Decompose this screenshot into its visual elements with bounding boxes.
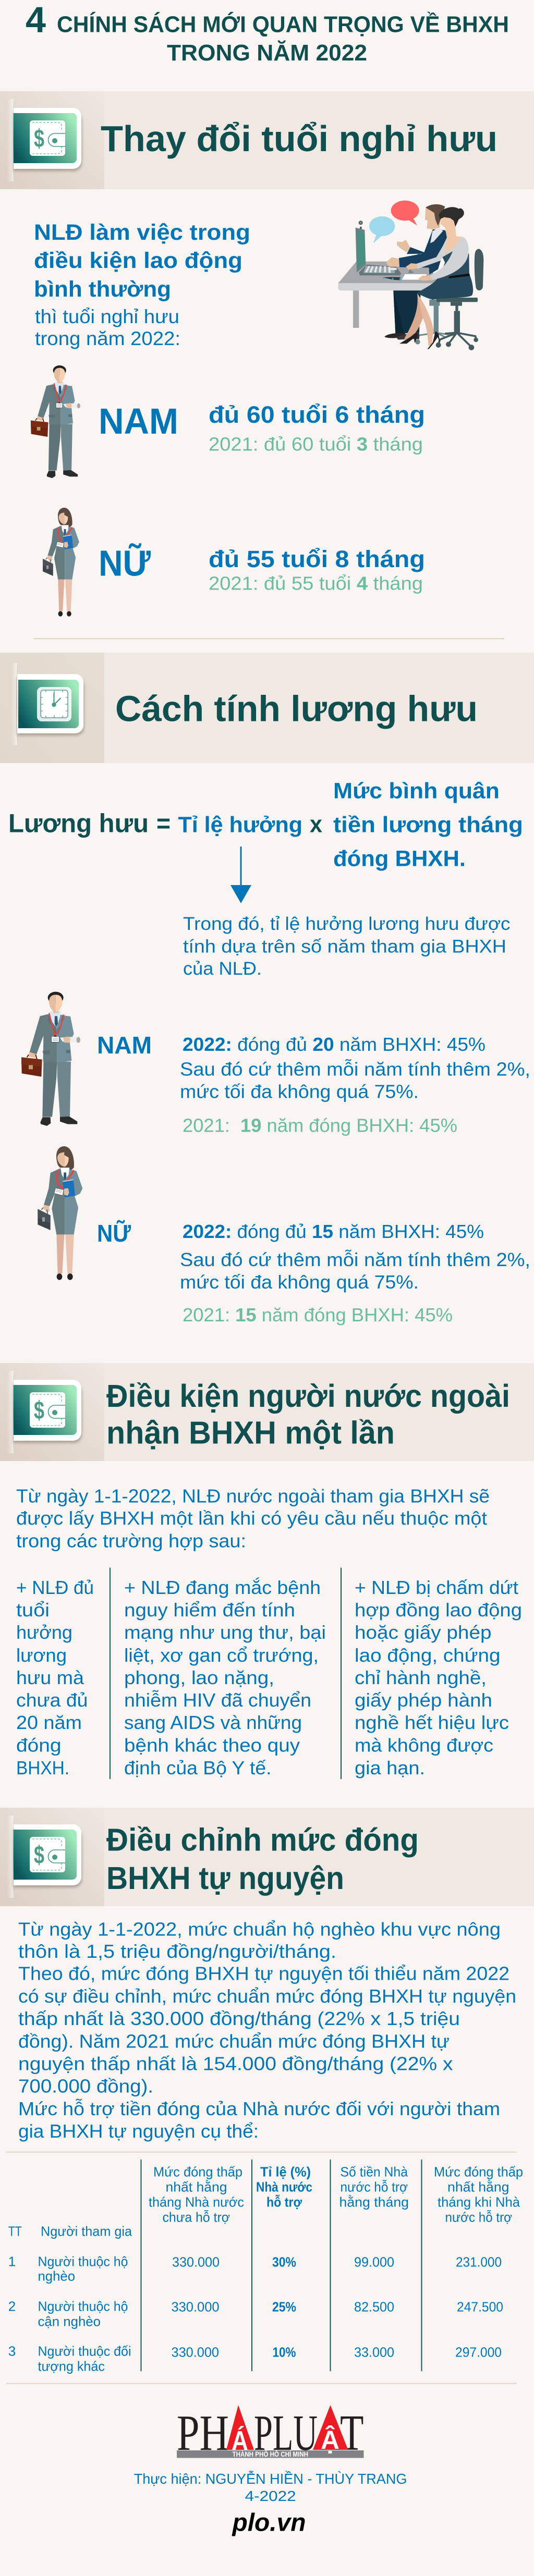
figure: man [21, 992, 80, 1126]
condition column 2: liệt, xơ gan cổ trướng, [124, 1645, 319, 1666]
formula: Tỉ lệ hưởng [178, 812, 302, 837]
condition column 3: + NLĐ bị chấm dứt [355, 1577, 518, 1598]
table row 2: 247.500 [457, 2299, 503, 2314]
pension rate for women: 2022: đóng đủ 15 năm BHXH: 45% [183, 1221, 484, 1242]
table row 3: 33.000 [354, 2345, 394, 2360]
credits [134, 2471, 407, 2504]
table header: Tỉ lệ (%) [260, 2164, 311, 2180]
condition column 3 [355, 1577, 522, 1778]
table row 1: 1 [8, 2254, 16, 2270]
label: NỮ: NỮ [99, 543, 151, 584]
retirement age for women [209, 546, 425, 594]
condition column 1: lương [16, 1645, 67, 1666]
figure: man [31, 365, 80, 478]
section banner: voluntary contribution: BHXH tự nguyện [106, 1860, 344, 1896]
section banner: retirement age: $ [34, 125, 44, 153]
table header: Mức đóng thấp [434, 2164, 523, 2180]
table header: nước hỗ trợ [340, 2179, 408, 2194]
paragraph: nguyện thấp nhất là 154.000 đồng/tháng (22% x [18, 2053, 453, 2075]
formula: Lương hưu [8, 809, 149, 838]
condition column 1: hưởng [16, 1622, 72, 1643]
logo: Pháp Luật: T [340, 2405, 364, 2461]
label: NAM: NAM [97, 1032, 152, 1059]
condition column 1: hưu mà [16, 1667, 84, 1688]
table header [8, 2164, 523, 2239]
condition column 1: + NLĐ đủ [16, 1577, 94, 1598]
condition column 2: định của Bộ Y tế. [124, 1757, 271, 1778]
paragraph: 700.000 đồng). [18, 2076, 153, 2096]
paragraph: đồng). Năm 2021 mức chuẩn mức đóng BHXH tự [18, 2031, 450, 2052]
condition column 3: chỉ hành nghề, [355, 1667, 487, 1688]
condition column 3: hợp đồng lao động [355, 1599, 522, 1621]
table row 2: 25% [272, 2299, 296, 2314]
table row 1: Người thuộc hộ [38, 2254, 128, 2270]
paragraph: thôn là 1,5 triệu đồng/người/tháng. [18, 1941, 336, 1962]
retirement age for men: 2021: đủ 60 tuổi 3 tháng [209, 434, 423, 455]
table: state support levels [6, 2152, 523, 2384]
figure: woman [38, 1146, 82, 1280]
retirement age for men: đủ 60 tuổi 6 tháng [209, 401, 425, 428]
table row 3: Người thuộc đối [38, 2344, 131, 2359]
title [26, 0, 509, 66]
intro paragraph: Từ ngày 1-1-2022, NLĐ nước ngoài tham gia BHXH sẽ [16, 1486, 490, 1506]
table header: nhất hằng [166, 2179, 227, 2194]
icon: clock [37, 687, 71, 721]
figure: woman [43, 508, 79, 617]
logo: Pháp Luật: Ậ [321, 2425, 339, 2455]
table header: hỗ trợ [266, 2194, 302, 2210]
condition column 1: BHXH. [16, 1757, 69, 1778]
table row 1: 99.000 [354, 2254, 394, 2270]
paragraph: có sự điều chỉnh, mức chuẩn mức đóng BHXH tự nguyện [18, 1985, 516, 2007]
table header: nước hỗ trợ [445, 2209, 512, 2225]
retirement age for men [209, 401, 425, 455]
formula: tiền lương tháng [333, 812, 523, 837]
section banner: voluntary contribution [0, 1808, 534, 1906]
panel: voluntary contribution [0, 1808, 534, 2384]
table row 2: 330.000 [171, 2299, 219, 2314]
table row 1: nghèo [38, 2268, 75, 2284]
explanation text [183, 914, 510, 979]
section banner: foreign workers: nhận BHXH một lần [106, 1415, 395, 1450]
table row 3: 297.000 [455, 2345, 502, 2360]
formula: Mức bình quân [333, 779, 500, 804]
condition column 2: sang AIDS và những [124, 1712, 302, 1733]
section banner: foreign workers: Điều kiện người nước ngoài [106, 1378, 510, 1414]
logo: Pháp Luật [177, 2405, 364, 2461]
table row 3: tượng khác [38, 2358, 105, 2374]
condition column 3: gia hạn. [355, 1757, 425, 1778]
intro text [34, 220, 250, 349]
logo: Pháp Luật: THÀNH PHỐ HỒ CHÍ MINH [233, 2449, 308, 2458]
paragraph: Từ ngày 1-1-2022, mức chuẩn hộ nghèo khu vực nông [18, 1918, 501, 1940]
title: TRONG NĂM 2022 [167, 40, 367, 66]
table header: Người tham gia [41, 2224, 132, 2239]
section banner: voluntary contribution: $ [34, 1842, 44, 1869]
table row 2: 2 [8, 2299, 16, 2314]
table header: TT [8, 2224, 22, 2239]
table row 2: 82.500 [354, 2299, 394, 2314]
pension rate for men: Sau đó cứ thêm mỗi năm tính thêm 2%, [180, 1058, 530, 1080]
pension rate for women: mức tối đa không quá 75%. [180, 1271, 419, 1293]
illustration: office workers at desk [338, 201, 483, 350]
pension rate for women [180, 1221, 530, 1326]
condition column 2 [124, 1577, 326, 1778]
table header: tháng Nhà nước [149, 2194, 244, 2210]
condition column 2: nguy hiểm đến tính [124, 1599, 295, 1621]
title: CHÍNH SÁCH MỚI QUAN TRỌNG VỀ BHXH [57, 11, 509, 38]
pension rate for men [180, 1034, 530, 1136]
intro paragraph: trong các trường hợp sau: [16, 1530, 246, 1551]
table header: Số tiền Nhà [340, 2164, 408, 2180]
condition column 3: giấy phép hành [355, 1689, 492, 1711]
condition column 1: tuổi [16, 1599, 50, 1621]
condition column 1 [16, 1577, 94, 1778]
table header: chưa hỗ trợ [163, 2209, 230, 2225]
condition column 2: mạng như ung thư, bại [124, 1622, 326, 1643]
credits: 4-2022 [245, 2488, 296, 2504]
formula: = [156, 809, 171, 838]
pension rate for men: 2022: đóng đủ 20 năm BHXH: 45% [183, 1034, 486, 1055]
label: NAM: NAM [99, 401, 178, 441]
website: plo.vn [232, 2509, 306, 2536]
condition column 3: lao động, chứng [355, 1645, 501, 1666]
table row 3: 10% [272, 2345, 296, 2360]
retirement age for women: đủ 55 tuổi 8 tháng [209, 546, 425, 572]
pension rate for men: 2021: 19 năm đóng BHXH: 45% [183, 1114, 457, 1136]
table row 1: 30% [272, 2254, 296, 2270]
label: NỮ: NỮ [97, 1220, 131, 1247]
table header: Mức đóng thấp [153, 2164, 242, 2180]
table row 2: cận nghèo [38, 2313, 101, 2329]
table row 1 [8, 2254, 502, 2284]
pension rate for women: 2021: 15 năm đóng BHXH: 45% [183, 1304, 453, 1326]
pension rate for men: mức tối đa không quá 75%. [180, 1081, 419, 1102]
panel: pension calculation [0, 653, 534, 1326]
intro paragraph: được lấy BHXH một lần khi có yêu cầu nếu thuộc một [16, 1507, 487, 1529]
credits: Thực hiện: NGUYỄN HIỀN - THÙY TRANG [134, 2471, 407, 2487]
table header: tháng khi Nhà [438, 2194, 520, 2210]
condition column 3: mà không được [355, 1735, 493, 1756]
intro text: NLĐ làm việc trong [34, 220, 250, 245]
formula: x [310, 811, 322, 837]
paragraph: Mức hỗ trợ tiền đóng của Nhà nước đối với người tham [18, 2098, 500, 2119]
table row 3: 3 [8, 2344, 16, 2359]
section banner: voluntary contribution: Điều chỉnh mức đóng [106, 1822, 419, 1858]
table row 1: 231.000 [456, 2254, 502, 2270]
formula [8, 779, 523, 872]
paragraph: Theo đó, mức đóng BHXH tự nguyện tối thiểu năm 2022 [18, 1963, 509, 1984]
intro text: điều kiện lao động [34, 248, 242, 273]
table header: nhất hằng [447, 2179, 509, 2194]
arrow: down to explanation [230, 847, 251, 903]
table row 3 [8, 2344, 502, 2374]
table row 1: 330.000 [172, 2254, 220, 2270]
logo: Pháp Luật: PLU [254, 2405, 318, 2461]
condition column 2: bệnh khác theo quy [124, 1735, 300, 1756]
section banner: pension calculation [0, 653, 534, 763]
formula: đóng BHXH. [333, 847, 466, 872]
section banner: retirement age: Thay đổi tuổi nghỉ hưu [101, 118, 497, 159]
intro text: trong năm 2022: [35, 328, 180, 349]
title: 4 [26, 0, 46, 40]
paragraph: gia BHXH tự nguyện cụ thể: [18, 2120, 259, 2142]
table row 3: 330.000 [171, 2345, 219, 2360]
explanation text: Trong đó, tỉ lệ hưởng lương hưu được [183, 914, 510, 934]
table header: Nhà nước [256, 2179, 312, 2194]
panel: foreign workers lump-sum [0, 1363, 534, 1779]
condition column 2: phong, lao nặng, [124, 1667, 274, 1688]
logo: Pháp Luật: PH [177, 2405, 229, 2461]
section banner: pension calculation: Cách tính lương hưu [115, 688, 478, 729]
pension rate for women: Sau đó cứ thêm mỗi năm tính thêm 2%, [180, 1249, 530, 1270]
condition column 3: hoặc giấy phép [355, 1622, 491, 1643]
paragraph [18, 1918, 516, 2142]
explanation text: tính dựa trên số năm tham gia BHXH [183, 936, 506, 957]
explanation text: của NLĐ. [183, 959, 262, 979]
retirement age for women: 2021: đủ 55 tuổi 4 tháng [209, 572, 423, 594]
panel: retirement age [0, 91, 534, 639]
table row 2: Người thuộc hộ [38, 2299, 128, 2314]
condition column 3: nghề hết hiệu lực [355, 1712, 509, 1733]
paragraph: thấp nhất là 330.000 đồng/tháng (22% x 1,5 triệu [18, 2008, 460, 2029]
condition column 1: 20 năm [16, 1712, 82, 1733]
table header: hằng tháng [339, 2194, 409, 2210]
section banner: retirement age [0, 91, 534, 189]
table row 2 [8, 2299, 503, 2329]
condition column 1: đóng [16, 1735, 62, 1756]
intro text: thì tuổi nghỉ hưu [35, 306, 179, 327]
condition column 2: + NLĐ đang mắc bệnh [124, 1577, 321, 1598]
section banner: foreign workers: $ [34, 1397, 44, 1425]
condition column 2: nhiễm HIV đã chuyển [124, 1689, 311, 1711]
section banner: foreign workers [0, 1363, 534, 1461]
logo: Pháp Luật: Á [232, 2426, 248, 2456]
intro text: bình thường [34, 277, 171, 302]
condition column 1: chưa đủ [16, 1689, 88, 1711]
intro paragraph [16, 1486, 490, 1551]
